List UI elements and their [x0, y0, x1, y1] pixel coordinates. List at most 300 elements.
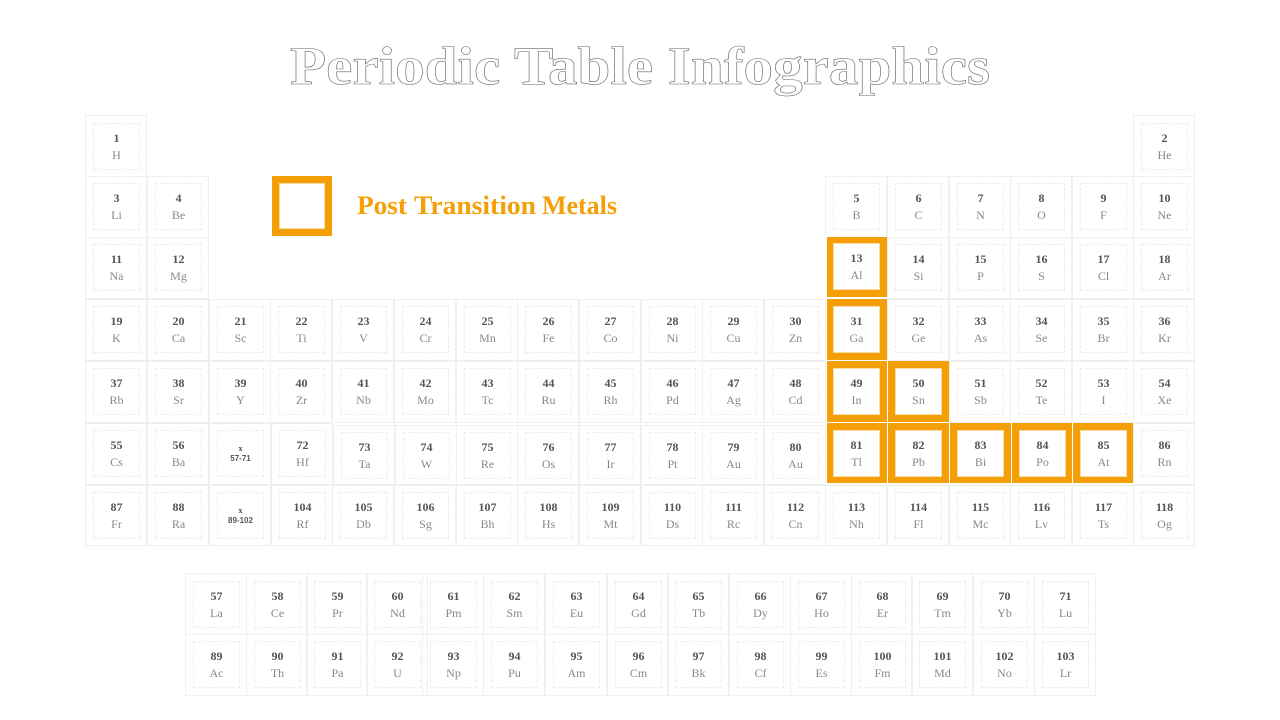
element 16 S: S — [1038, 268, 1045, 282]
element 48 Cd: 48 — [790, 376, 802, 390]
element 90 Th — [246, 634, 308, 696]
element 85 At highlighted: At — [1098, 454, 1110, 468]
element 42 Mo — [394, 361, 456, 423]
element 109 Mt: Mt — [603, 516, 618, 530]
element 58 Ce: Ce — [271, 606, 284, 620]
element 60 Nd: Nd — [390, 606, 405, 620]
element 110 Ds — [641, 485, 703, 546]
element 39 Y: Y — [236, 392, 245, 406]
element 62 Sm: Sm — [506, 606, 522, 620]
element 34 Se — [1010, 299, 1072, 361]
element 96 Cm: Cm — [630, 666, 647, 680]
element 56 Ba: 56 — [172, 438, 184, 452]
element 88 Ra: Ra — [172, 516, 185, 530]
element 30 Zn: 30 — [790, 314, 802, 328]
element 111 Rc — [702, 485, 764, 546]
element 115 Mc — [949, 485, 1011, 546]
element 24 Cr: Cr — [420, 330, 432, 344]
element 68 Er — [851, 573, 913, 635]
element 22 Ti: 22 — [296, 314, 308, 328]
element 74 W: W — [421, 456, 432, 470]
element 99 Es: Es — [816, 666, 828, 680]
element 101 Md — [911, 634, 973, 696]
element 46 Pd — [641, 361, 703, 423]
element 61 Pm — [422, 573, 484, 635]
element 71 Lu: Lu — [1059, 606, 1072, 620]
element 44 Ru — [517, 361, 579, 423]
element 20 Ca: 20 — [172, 314, 184, 328]
element 8 O: 8 — [1038, 190, 1044, 204]
element 13 Al highlighted: Al — [850, 268, 862, 282]
element 59 Pr — [306, 573, 368, 635]
element 61 Pm: 61 — [448, 588, 460, 602]
f-block table — [185, 573, 1096, 696]
element 7 N — [949, 176, 1011, 238]
element 65 Tb — [667, 573, 729, 635]
element 103 Lr: 103 — [1056, 648, 1074, 662]
element 98 Cf: 98 — [754, 648, 766, 662]
element 86 Rn — [1133, 423, 1195, 485]
element 4 Be: 4 — [176, 190, 182, 204]
element 50 Sn highlighted: 50 — [912, 376, 924, 390]
element 110 Ds: Ds — [666, 516, 679, 530]
element 5 B — [825, 176, 887, 238]
element 30 Zn — [764, 299, 826, 361]
element 72 Hf: 72 — [296, 438, 308, 452]
element 18 Ar: 18 — [1158, 252, 1170, 266]
element 76 Os: 76 — [542, 440, 554, 454]
element 41 Nb: 41 — [358, 376, 370, 390]
element 83 Bi highlighted: Bi — [975, 454, 986, 468]
element 94 Pu — [483, 634, 545, 696]
element 97 Bk — [667, 634, 729, 696]
element 15 P: P — [977, 268, 984, 282]
element 108 Hs: Hs — [542, 516, 555, 530]
element 14 Si: 14 — [912, 252, 924, 266]
element 4 Be — [147, 176, 209, 238]
element 53 I: I — [1102, 392, 1106, 406]
element 78 Pt: 78 — [666, 440, 678, 454]
element 69 Tm: 69 — [936, 588, 948, 602]
element 109 Mt — [579, 485, 641, 546]
element 107 Bh: Bh — [480, 516, 494, 530]
element 54 Xe — [1133, 361, 1195, 423]
element 14 Si — [887, 237, 949, 299]
element 79 Au: 79 — [728, 440, 740, 454]
element 1 H: H — [112, 148, 121, 162]
element 5 B: B — [852, 208, 860, 222]
element 89 Ac: 89 — [210, 648, 222, 662]
element 102 No — [973, 634, 1035, 696]
element 47 Ag — [702, 361, 764, 423]
element 58 Ce: 58 — [272, 588, 284, 602]
element 40 Zr: 40 — [296, 376, 308, 390]
element 35 Br — [1072, 299, 1134, 361]
element 28 Ni: Ni — [666, 330, 678, 344]
element 67 Ho: 67 — [816, 588, 828, 602]
element 32 Ge — [887, 299, 949, 361]
element 55 Cs: Cs — [110, 454, 123, 468]
element 111 Rc: 111 — [725, 500, 742, 514]
element 63 Eu: Eu — [570, 606, 583, 620]
element 25 Mn — [456, 299, 518, 361]
element 84 Po highlighted — [1012, 423, 1072, 483]
element 66 Dy — [729, 573, 791, 635]
element 9 F — [1072, 176, 1134, 238]
element 7 N: 7 — [978, 190, 984, 204]
element 10 Ne — [1133, 176, 1195, 238]
legend swatch — [272, 176, 332, 236]
element 45 Rh: Rh — [603, 392, 618, 406]
element 40 Zr: Zr — [296, 392, 307, 406]
element 52 Te: Te — [1036, 392, 1047, 406]
element 22 Ti: Ti — [296, 330, 307, 344]
element 10 Ne: 10 — [1158, 190, 1170, 204]
element 95 Am: Am — [568, 666, 586, 680]
element 93 Np: 93 — [448, 648, 460, 662]
lanthanide placeholder: 57-71 — [230, 454, 251, 462]
legend label — [357, 191, 617, 220]
element 59 Pr: Pr — [332, 606, 343, 620]
element 103 Lr — [1034, 634, 1096, 696]
element 41 Nb: Nb — [356, 392, 371, 406]
legend label: Metals — [542, 191, 617, 220]
element 39 Y — [209, 361, 271, 423]
element 113 Nh — [825, 485, 887, 546]
element 55 Cs — [85, 423, 147, 485]
element 81 Tl highlighted: Tl — [851, 454, 862, 468]
element 7 N: N — [976, 208, 985, 222]
element 36 Kr: 36 — [1158, 314, 1170, 328]
element 18 Ar: Ar — [1158, 268, 1171, 282]
element 117 Ts: Ts — [1098, 516, 1109, 530]
element 108 Hs — [517, 485, 579, 546]
element 91 Pa: Pa — [332, 666, 344, 680]
element 10 Ne: Ne — [1158, 208, 1172, 222]
element 30 Zn: Zn — [789, 330, 802, 344]
element 51 Sb — [949, 361, 1011, 423]
element 90 Th: 90 — [272, 648, 284, 662]
element 32 Ge: Ge — [912, 330, 926, 344]
element 75 Re: Re — [481, 456, 494, 470]
element 99 Es — [790, 634, 852, 696]
element 26 Fe: Fe — [542, 330, 554, 344]
element 42 Mo: 42 — [420, 376, 432, 390]
element 76 Os: Os — [542, 456, 555, 470]
element 101 Md: Md — [934, 666, 951, 680]
element 34 Se: 34 — [1036, 314, 1048, 328]
element 23 V: 23 — [358, 314, 370, 328]
element 55 Cs: 55 — [110, 438, 122, 452]
element 118 Og — [1133, 485, 1195, 546]
element 50 Sn highlighted: Sn — [912, 392, 925, 406]
element 100 Fm: 100 — [874, 648, 892, 662]
element 3 Li: 3 — [114, 190, 120, 204]
actinide placeholder — [209, 485, 271, 546]
element 110 Ds: 110 — [664, 500, 681, 514]
element 113 Nh: Nh — [849, 516, 864, 530]
element 91 Pa: 91 — [332, 648, 344, 662]
element 81 Tl highlighted — [827, 423, 887, 483]
element 64 Gd: Gd — [631, 606, 646, 620]
element 12 Mg: 12 — [172, 252, 184, 266]
element 29 Cu: Cu — [726, 330, 740, 344]
element 96 Cm: 96 — [632, 648, 644, 662]
element 2 He — [1133, 115, 1195, 177]
main periodic table — [85, 115, 1195, 546]
element 33 As: 33 — [974, 314, 986, 328]
element 15 P — [949, 237, 1011, 299]
element 41 Nb — [332, 361, 394, 423]
element 100 Fm — [851, 634, 913, 696]
element 92 U: 92 — [392, 648, 404, 662]
element 78 Pt — [641, 425, 703, 485]
element 79 Au — [702, 425, 764, 485]
element 19 K: K — [112, 330, 121, 344]
element 44 Ru: Ru — [541, 392, 556, 406]
element 32 Ge: 32 — [912, 314, 924, 328]
element 112 Cn — [764, 485, 826, 546]
element 93 Np: Np — [446, 666, 461, 680]
element 47 Ag: 47 — [728, 376, 740, 390]
element 36 Kr — [1133, 299, 1195, 361]
element 102 No: No — [997, 666, 1012, 680]
element 79 Au: Au — [726, 456, 741, 470]
legend label: Transition — [414, 191, 537, 220]
element 57 La — [185, 573, 247, 635]
element 45 Rh: 45 — [604, 376, 616, 390]
element 81 Tl highlighted: 81 — [850, 438, 862, 452]
element 75 Re — [456, 425, 518, 485]
element 3 Li — [85, 176, 147, 238]
element 102 No: 102 — [996, 648, 1014, 662]
element 80 Au: Au — [788, 456, 803, 470]
element 9 F: F — [1100, 208, 1107, 222]
element 49 In highlighted: In — [852, 392, 862, 406]
element 90 Th: Th — [271, 666, 284, 680]
element 77 Ir: 77 — [604, 440, 616, 454]
element 61 Pm: Pm — [445, 606, 462, 620]
element 17 Cl — [1072, 237, 1134, 299]
element 12 Mg — [147, 237, 209, 299]
element 115 Mc: Mc — [972, 516, 988, 530]
element 76 Os — [517, 425, 579, 485]
element 57 La: 57 — [210, 588, 222, 602]
element 56 Ba — [147, 423, 209, 485]
element 46 Pd: Pd — [666, 392, 679, 406]
element 17 Cl: Cl — [1098, 268, 1109, 282]
element 104 Rf — [271, 485, 333, 546]
element 43 Tc: 43 — [482, 376, 494, 390]
element 77 Ir — [579, 425, 641, 485]
element 24 Cr — [394, 299, 456, 361]
actinide placeholder: x — [238, 506, 242, 514]
element 87 Fr: Fr — [111, 516, 122, 530]
element 13 Al highlighted — [827, 237, 887, 297]
element 14 Si: Si — [913, 268, 924, 282]
element 6 C: C — [914, 208, 922, 222]
element 49 In highlighted — [827, 361, 887, 422]
element 74 W — [395, 425, 457, 485]
element 6 C: 6 — [916, 190, 922, 204]
element 118 Og: Og — [1157, 516, 1172, 530]
element 97 Bk: Bk — [691, 666, 706, 680]
element 48 Cd: Cd — [788, 392, 802, 406]
element 4 Be: Be — [172, 208, 185, 222]
element 13 Al highlighted: 13 — [850, 250, 862, 264]
element 118 Og: 118 — [1156, 500, 1173, 514]
element 51 Sb: 51 — [974, 376, 986, 390]
element 75 Re: 75 — [482, 440, 494, 454]
element 48 Cd — [764, 361, 826, 423]
element 78 Pt: Pt — [667, 456, 678, 470]
element 56 Ba: Ba — [172, 454, 185, 468]
element 93 Np — [422, 634, 484, 696]
element 98 Cf — [729, 634, 791, 696]
element 19 K: 19 — [110, 314, 122, 328]
element 28 Ni — [641, 299, 703, 361]
element 84 Po highlighted: 84 — [1036, 438, 1048, 452]
element 53 I: 53 — [1098, 376, 1110, 390]
element 26 Fe — [517, 299, 579, 361]
element 3 Li: Li — [111, 208, 122, 222]
element 60 Nd — [366, 573, 428, 635]
element 95 Am — [545, 634, 607, 696]
element 109 Mt: 109 — [602, 500, 620, 514]
element 50 Sn highlighted — [888, 361, 949, 422]
element 87 Fr: 87 — [110, 500, 122, 514]
element 82 Pb highlighted — [888, 423, 949, 483]
element 46 Pd: 46 — [666, 376, 678, 390]
element 6 C — [887, 176, 949, 238]
element 2 He: 2 — [1162, 130, 1168, 144]
element 85 At highlighted: 85 — [1098, 438, 1110, 452]
element 117 Ts — [1072, 485, 1134, 546]
element 27 Co: Co — [603, 330, 618, 344]
element 21 Sc: Sc — [234, 330, 246, 344]
element 111 Rc: Rc — [727, 516, 740, 530]
element 82 Pb highlighted: 82 — [912, 438, 924, 452]
element 38 Sr — [147, 361, 209, 423]
element 88 Ra: 88 — [172, 500, 184, 514]
element 1 H — [85, 115, 147, 177]
element 38 Sr: 38 — [172, 376, 184, 390]
element 65 Tb: Tb — [692, 606, 705, 620]
element 116 Lv: 116 — [1033, 500, 1050, 514]
element 80 Au: 80 — [790, 440, 802, 454]
element 100 Fm: Fm — [874, 666, 890, 680]
element 103 Lr: Lr — [1060, 666, 1071, 680]
element 71 Lu — [1034, 573, 1096, 635]
element 105 Db — [332, 485, 394, 546]
element 66 Dy: 66 — [754, 588, 766, 602]
title: Periodic Table Infographics — [290, 36, 990, 96]
element 53 I — [1072, 361, 1134, 423]
element 37 Rb — [85, 361, 147, 423]
element 95 Am: 95 — [570, 648, 582, 662]
element 117 Ts: 117 — [1095, 500, 1112, 514]
element 73 Ta: 73 — [358, 440, 370, 454]
lanthanide placeholder: x — [238, 444, 242, 452]
element 8 O: O — [1037, 208, 1046, 222]
element 101 Md: 101 — [934, 648, 952, 662]
element 16 S — [1010, 237, 1072, 299]
element 21 Sc — [209, 299, 271, 361]
element 35 Br: Br — [1098, 330, 1110, 344]
element 19 K — [85, 299, 147, 361]
element 112 Cn: 112 — [787, 500, 804, 514]
element 87 Fr — [85, 485, 147, 546]
element 73 Ta — [333, 425, 395, 485]
element 37 Rb: Rb — [109, 392, 124, 406]
element 40 Zr — [270, 361, 332, 423]
element 72 Hf: Hf — [296, 454, 309, 468]
element 96 Cm — [607, 634, 669, 696]
element 82 Pb highlighted: Pb — [912, 454, 925, 468]
element 45 Rh — [579, 361, 641, 423]
element 31 Ga highlighted: 31 — [850, 314, 862, 328]
element 92 U — [366, 634, 428, 696]
element 71 Lu: 71 — [1060, 588, 1072, 602]
element 8 O — [1010, 176, 1072, 238]
element 98 Cf: Cf — [754, 666, 766, 680]
element 57 La: La — [210, 606, 223, 620]
element 77 Ir: Ir — [606, 456, 614, 470]
element 94 Pu: 94 — [508, 648, 520, 662]
element 94 Pu: Pu — [508, 666, 521, 680]
element 27 Co — [579, 299, 641, 361]
element 105 Db: Db — [356, 516, 371, 530]
element 83 Bi highlighted — [950, 423, 1011, 483]
element 85 At highlighted — [1073, 423, 1133, 483]
element 63 Eu: 63 — [570, 588, 582, 602]
element 70 Yb: 70 — [998, 588, 1010, 602]
element 106 Sg: 106 — [416, 500, 434, 514]
element 26 Fe: 26 — [542, 314, 554, 328]
element 66 Dy: Dy — [753, 606, 768, 620]
element 106 Sg — [394, 485, 456, 546]
actinide placeholder: 89-102 — [228, 516, 253, 524]
lanthanide placeholder — [209, 423, 271, 485]
element 49 In highlighted: 49 — [850, 376, 862, 390]
element 21 Sc: 21 — [234, 314, 246, 328]
element 88 Ra — [147, 485, 209, 546]
element 97 Bk: 97 — [692, 648, 704, 662]
element 89 Ac — [185, 634, 247, 696]
element 54 Xe: 54 — [1158, 376, 1170, 390]
element 38 Sr: Sr — [173, 392, 184, 406]
legend: post transition metals — [272, 176, 617, 236]
element 9 F: 9 — [1100, 190, 1106, 204]
element 62 Sm: 62 — [508, 588, 520, 602]
element 35 Br: 35 — [1098, 314, 1110, 328]
element 36 Kr: Kr — [1158, 330, 1171, 344]
element 69 Tm — [911, 573, 973, 635]
element 37 Rb: 37 — [110, 376, 122, 390]
element 64 Gd — [607, 573, 669, 635]
element 62 Sm — [483, 573, 545, 635]
element 107 Bh — [456, 485, 518, 546]
element 65 Tb: 65 — [692, 588, 704, 602]
element 67 Ho: Ho — [814, 606, 829, 620]
element 12 Mg: Mg — [170, 268, 187, 282]
element 114 Fl — [887, 485, 949, 546]
element 47 Ag: Ag — [726, 392, 741, 406]
element 24 Cr: 24 — [420, 314, 432, 328]
element 115 Mc: 115 — [972, 500, 989, 514]
element 52 Te — [1010, 361, 1072, 423]
element 23 V: V — [359, 330, 368, 344]
